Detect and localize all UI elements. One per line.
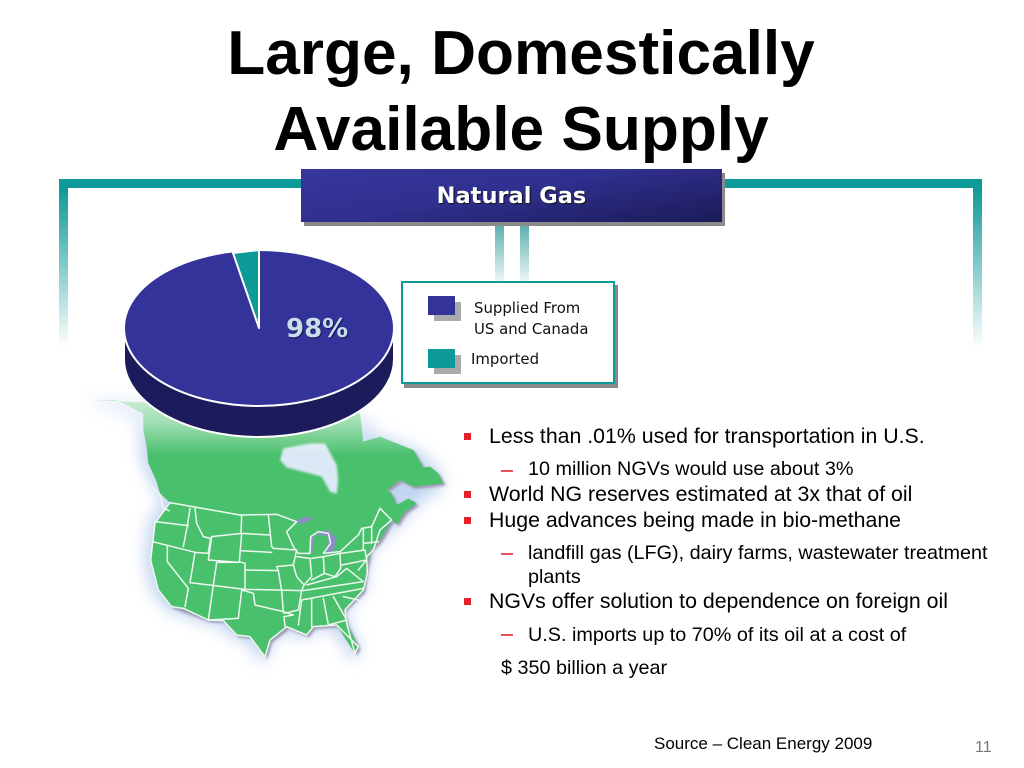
header label: Natural Gas bbox=[437, 183, 586, 209]
natural gas header box bbox=[301, 169, 722, 222]
bullet marker bbox=[464, 598, 471, 605]
map of North America bbox=[94, 396, 450, 666]
legend label supplied bbox=[474, 299, 588, 338]
legend swatch supplied bbox=[428, 296, 455, 315]
legend label imported: Imported bbox=[471, 350, 539, 368]
sub bullet 3: U.S. imports up to 70% of its oil at a cost of bbox=[528, 624, 906, 646]
bullet 4: NGVs offer solution to dependence on foreign oil bbox=[489, 589, 948, 613]
sub bullet 2: landfill gas (LFG), dairy farms, wastewater treatment bbox=[528, 542, 988, 564]
pie top bbox=[124, 250, 394, 406]
pie label: 98% bbox=[286, 314, 348, 344]
imported slice bbox=[233, 250, 259, 328]
bullet 3: Huge advances being made in bio-methane bbox=[489, 508, 901, 532]
title: Large, Domestically bbox=[227, 19, 815, 88]
cost line: $ 350 billion a year bbox=[501, 657, 667, 679]
dash marker bbox=[501, 634, 513, 636]
legend swatch imported bbox=[428, 349, 455, 368]
sub bullet 1: 10 million NGVs would use about 3% bbox=[528, 458, 853, 480]
sub bullet 2: plants bbox=[528, 566, 581, 588]
bullet marker bbox=[464, 433, 471, 440]
dash marker bbox=[501, 553, 513, 555]
title bbox=[227, 19, 815, 164]
bullet 1: Less than .01% used for transportation in U.S. bbox=[489, 424, 925, 448]
source note: Source – Clean Energy 2009 bbox=[654, 734, 872, 753]
sub bullet 2 bbox=[528, 542, 988, 588]
bullet marker bbox=[464, 491, 471, 498]
coast line bbox=[153, 487, 169, 511]
bullet marker bbox=[464, 517, 471, 524]
pie side bbox=[124, 328, 394, 437]
dash marker bbox=[501, 470, 513, 472]
legend label supplied: US and Canada bbox=[474, 320, 588, 338]
legend bbox=[401, 281, 615, 384]
legend label supplied: Supplied From bbox=[474, 299, 580, 317]
bullet list bbox=[464, 424, 988, 679]
title: Available Supply bbox=[273, 95, 769, 164]
page number: 11 bbox=[975, 739, 992, 756]
great lakes bbox=[293, 516, 337, 554]
bullet 2: World NG reserves estimated at 3x that of oil bbox=[489, 482, 912, 506]
state borders bbox=[151, 503, 392, 657]
